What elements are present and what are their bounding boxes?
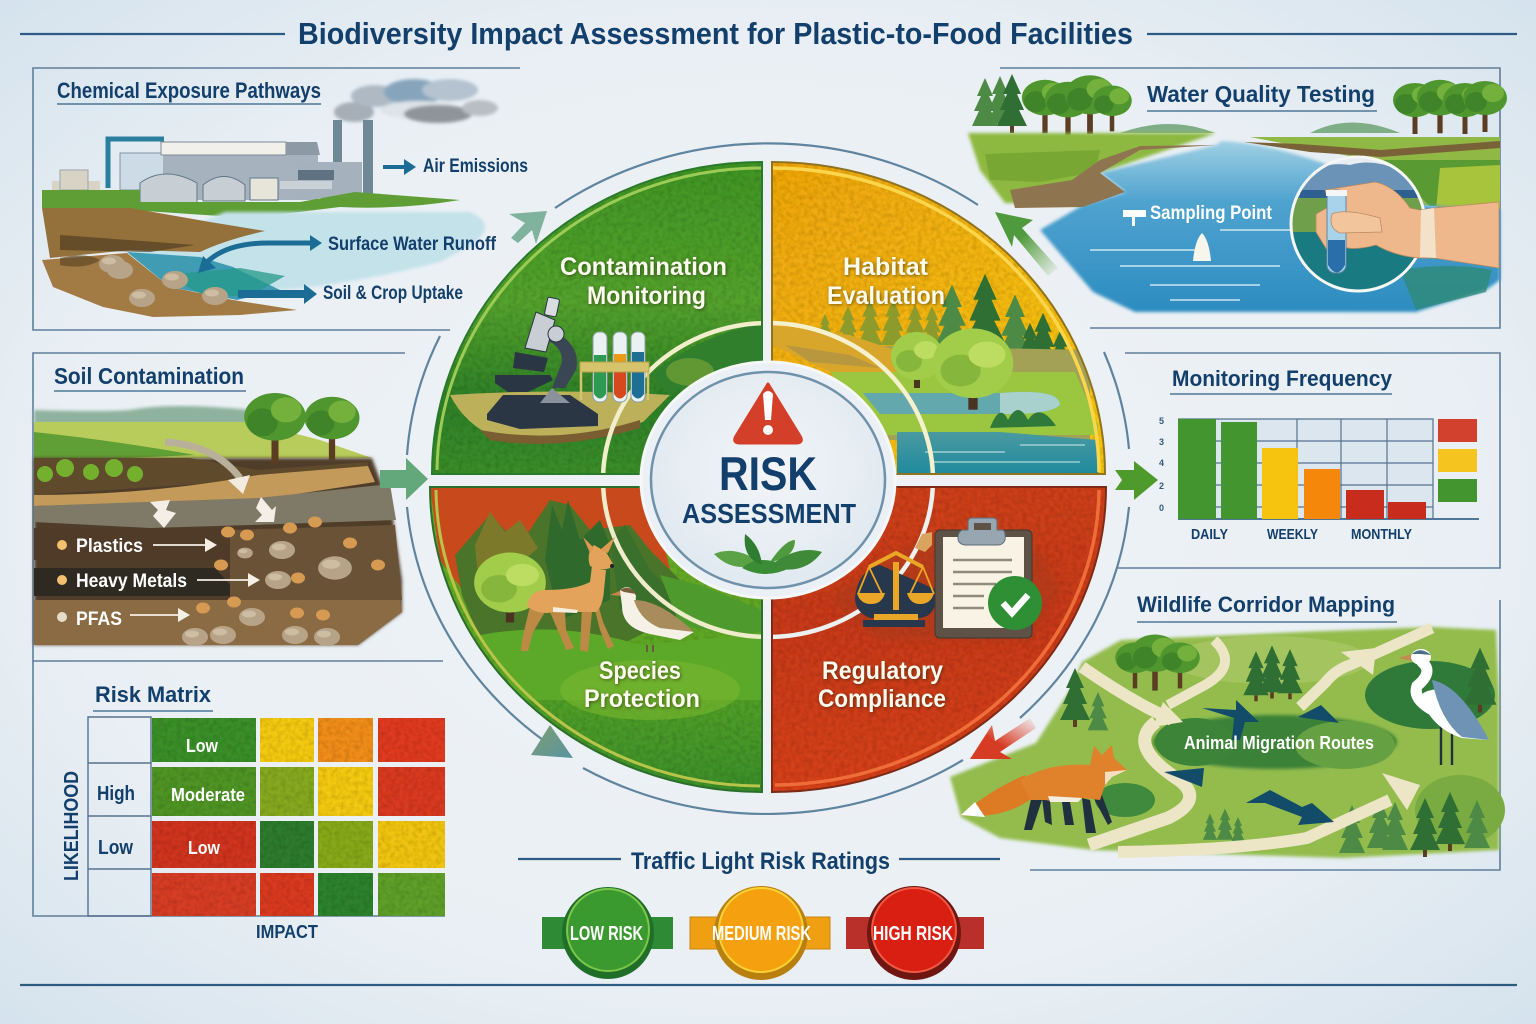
rating: high risk (846, 886, 984, 980)
label: surface water runoff: Surface Water Runoff (328, 234, 497, 255)
label: PFAS (57, 608, 190, 630)
quadrant: species protection (429, 486, 763, 793)
heading: risk matrix: Risk Matrix (95, 682, 212, 707)
title: Biodiversity Impact Assessment for Plastic-to-Food Facilities (298, 16, 1133, 51)
rating: medium risk (690, 886, 830, 980)
label: regulatory compliance (818, 657, 946, 713)
illustration: corridor map (950, 627, 1505, 858)
arrow: to monitoring frequency (1115, 461, 1158, 500)
chart legend (1438, 419, 1477, 502)
icon: fox (961, 745, 1127, 833)
matrix cell labels (171, 736, 245, 858)
arrow: to contamination monitoring (509, 211, 547, 244)
panel: wildlife corridor mapping (950, 592, 1505, 870)
label: soil and crop uptake: Soil & Crop Uptake (323, 283, 463, 304)
icon: bird (610, 587, 694, 652)
label: plastics: Plastics (76, 536, 143, 557)
matrix cell labels: Moderate (171, 785, 245, 805)
bar chart: 4 (1159, 458, 1164, 468)
icon: leaves (714, 534, 822, 574)
matrix row labels: Low (98, 837, 133, 859)
panel: chemical exposure pathways (33, 68, 528, 330)
label: heavy metals: Heavy Metals (76, 571, 187, 592)
rating: medium risk: MEDIUM RISK (712, 923, 811, 945)
bar chart: 5 (1159, 416, 1164, 426)
label: regulatory compliance: Regulatory (822, 657, 943, 685)
matrix cell labels: Low (188, 838, 221, 858)
icon: deer (521, 537, 615, 652)
label: regulatory compliance: Compliance (818, 685, 946, 713)
heading: wildlife corridor mapping: Wildlife Corridor Mapping (1137, 592, 1395, 617)
label: habitat evaluation: Evaluation (827, 282, 945, 310)
icon: clipboard (935, 518, 1032, 638)
rating: high risk: HIGH RISK (873, 923, 953, 945)
label: species protection (584, 657, 700, 713)
risk wheel (425, 155, 1108, 795)
arrow: surface water runoff (198, 235, 322, 273)
label: contamination monitoring (560, 253, 727, 310)
icon: heron (1398, 649, 1489, 765)
illustration: river landscape (968, 74, 1507, 312)
matrix cells (152, 718, 445, 916)
label: impact axis: IMPACT (256, 922, 318, 942)
heading: traffic light risk ratings: Traffic Light Risk Ratings (631, 848, 890, 875)
label: contamination monitoring: Contamination (560, 253, 727, 281)
quadrant: habitat evaluation (771, 161, 1106, 475)
chart axis labels (1191, 526, 1412, 543)
heading: chemical exposure pathways: Chemical Exposure Pathways (57, 78, 321, 103)
illustration: factory (52, 120, 373, 203)
label: species protection: Species (599, 657, 681, 685)
arrow: to species protection (531, 725, 573, 758)
chart axis labels: MONTHLY (1351, 526, 1412, 543)
illustration: ground and water (42, 190, 485, 317)
arrows: migration routes (1164, 700, 1339, 825)
bar chart: 3 (1159, 437, 1164, 447)
bar chart: 2 (1159, 481, 1164, 491)
bar chart: 0 (1159, 503, 1164, 513)
label: contamination monitoring: Monitoring (587, 282, 706, 310)
matrix row labels (88, 717, 151, 916)
arrow: soil and crop uptake (238, 284, 317, 304)
icon: smoke (334, 79, 498, 123)
arrow: to soil contamination (380, 458, 428, 500)
label: sampling point (1123, 203, 1273, 226)
panel: monitoring frequency (1118, 353, 1500, 568)
label: air emissions: Air Emissions (423, 156, 528, 177)
label: habitat evaluation: Habitat (843, 253, 929, 281)
label: plastics (57, 536, 217, 557)
icon: green check (988, 576, 1042, 630)
illustration: soil layers (34, 393, 402, 646)
panel: soil contamination (33, 353, 443, 661)
panel: risk matrix (33, 661, 445, 942)
heading: monitoring frequency: Monitoring Frequency (1172, 366, 1393, 391)
arrow: to water quality (995, 212, 1058, 276)
bar chart (1159, 416, 1479, 519)
outer process ring (407, 143, 1129, 814)
arrow: air emissions (383, 159, 416, 175)
label: heavy metals (57, 571, 260, 592)
label: habitat evaluation (827, 253, 945, 310)
icon: warning triangle (735, 384, 801, 443)
panel: water quality testing (968, 68, 1507, 328)
label: animal migration routes: Animal Migration Routes (1184, 733, 1374, 753)
matrix row labels: High (97, 783, 135, 805)
label: assessment: ASSESSMENT (682, 498, 856, 529)
quadrant: regulatory compliance (771, 486, 1107, 793)
rating: low risk: LOW RISK (570, 923, 643, 945)
label: PFAS: PFAS (76, 609, 122, 630)
label: sampling point: Sampling Point (1150, 203, 1273, 224)
quadrant: contamination monitoring (431, 161, 763, 475)
centre badge (641, 362, 895, 598)
icon: buoy (1193, 233, 1211, 261)
rating: low risk (542, 887, 673, 979)
label: risk: RISK (719, 447, 817, 500)
heading: water quality testing: Water Quality Testing (1147, 81, 1375, 107)
label: likelihood axis: LIKELIHOOD (61, 771, 83, 881)
matrix cell labels: Low (186, 736, 219, 756)
arrow: to wildlife corridors (970, 718, 1036, 759)
chart axis labels: DAILY (1191, 526, 1228, 543)
icon: scales of justice (855, 532, 937, 627)
icon: magnifier with hand and test tube (1290, 155, 1499, 292)
heading: soil contamination: Soil Contamination (54, 363, 244, 389)
icon: test tubes (580, 332, 649, 402)
icon: microscope (487, 297, 598, 429)
label: species protection: Protection (584, 685, 700, 713)
chart axis labels: WEEKLY (1267, 526, 1318, 543)
